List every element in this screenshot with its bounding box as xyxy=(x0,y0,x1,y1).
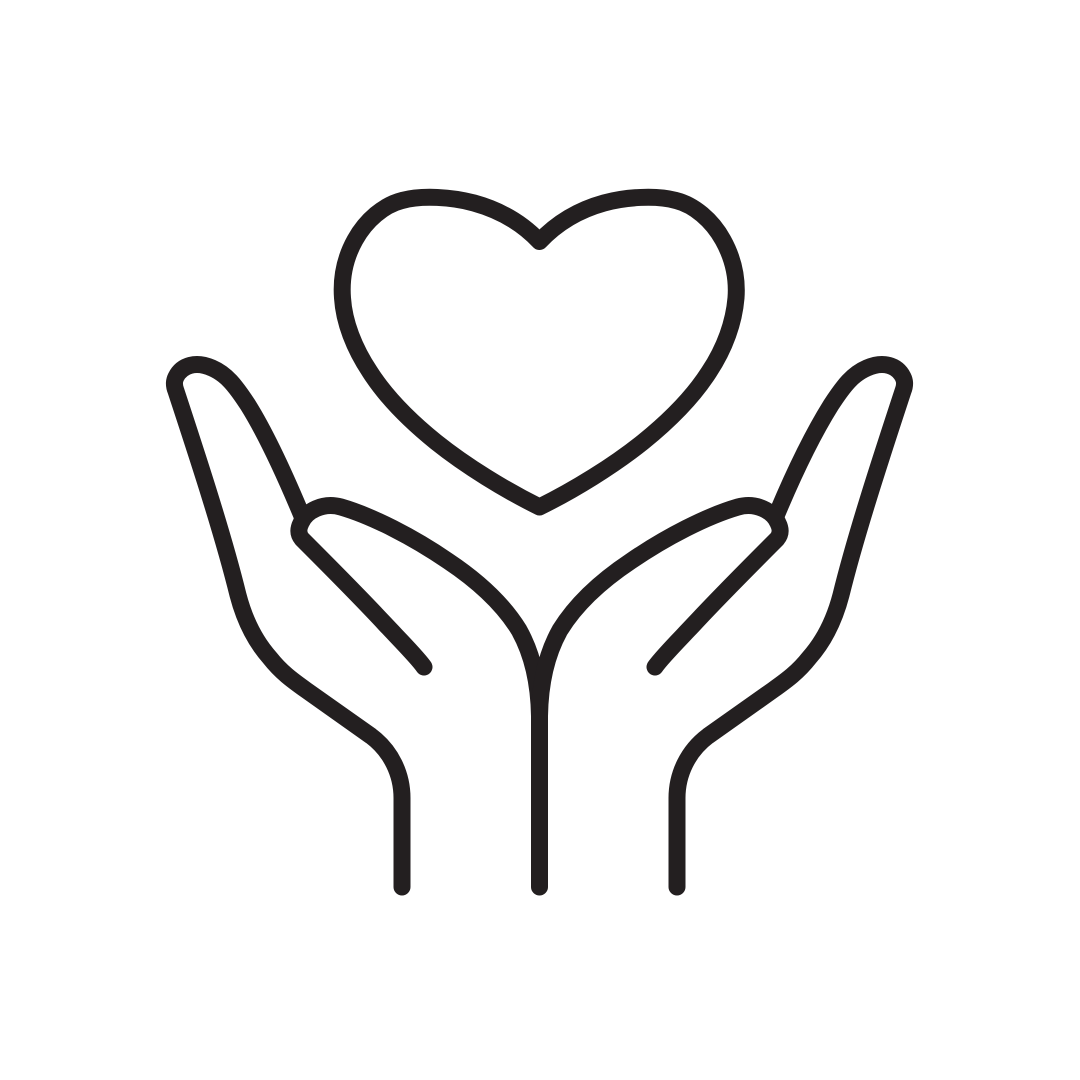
icon: left hand xyxy=(174,365,540,887)
icon: heart xyxy=(342,197,736,507)
icon: right hand xyxy=(540,365,904,887)
icon: centre wrist line xyxy=(531,716,548,887)
